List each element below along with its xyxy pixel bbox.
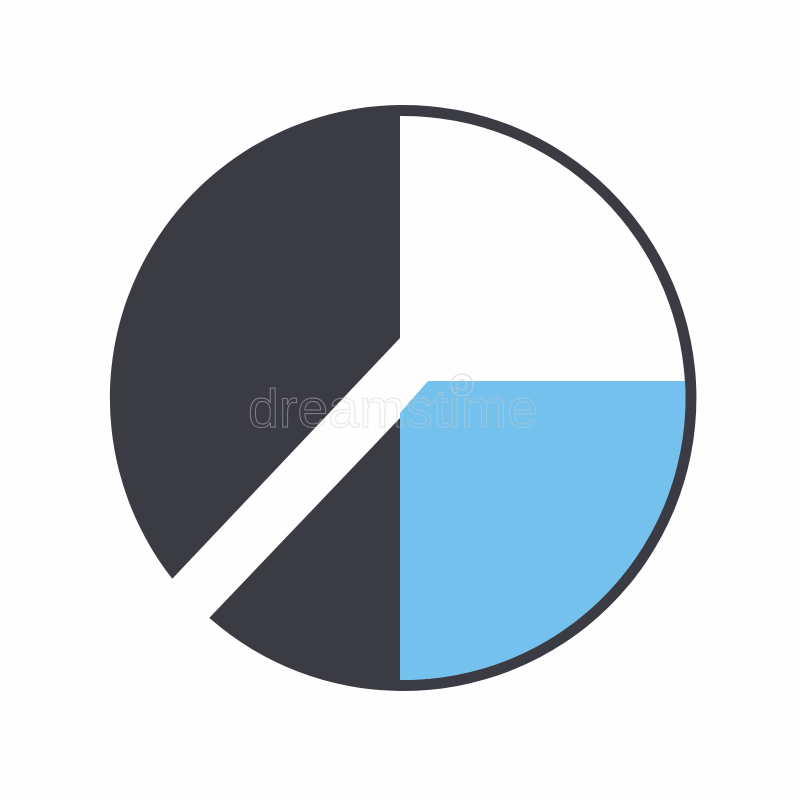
- slice: large dark segment: [110, 105, 400, 579]
- watermark: dreamstime: [248, 379, 538, 439]
- slice: blue segment: [400, 381, 686, 680]
- slice: small dark segment: [209, 418, 400, 691]
- ring: right half outline: [400, 105, 696, 691]
